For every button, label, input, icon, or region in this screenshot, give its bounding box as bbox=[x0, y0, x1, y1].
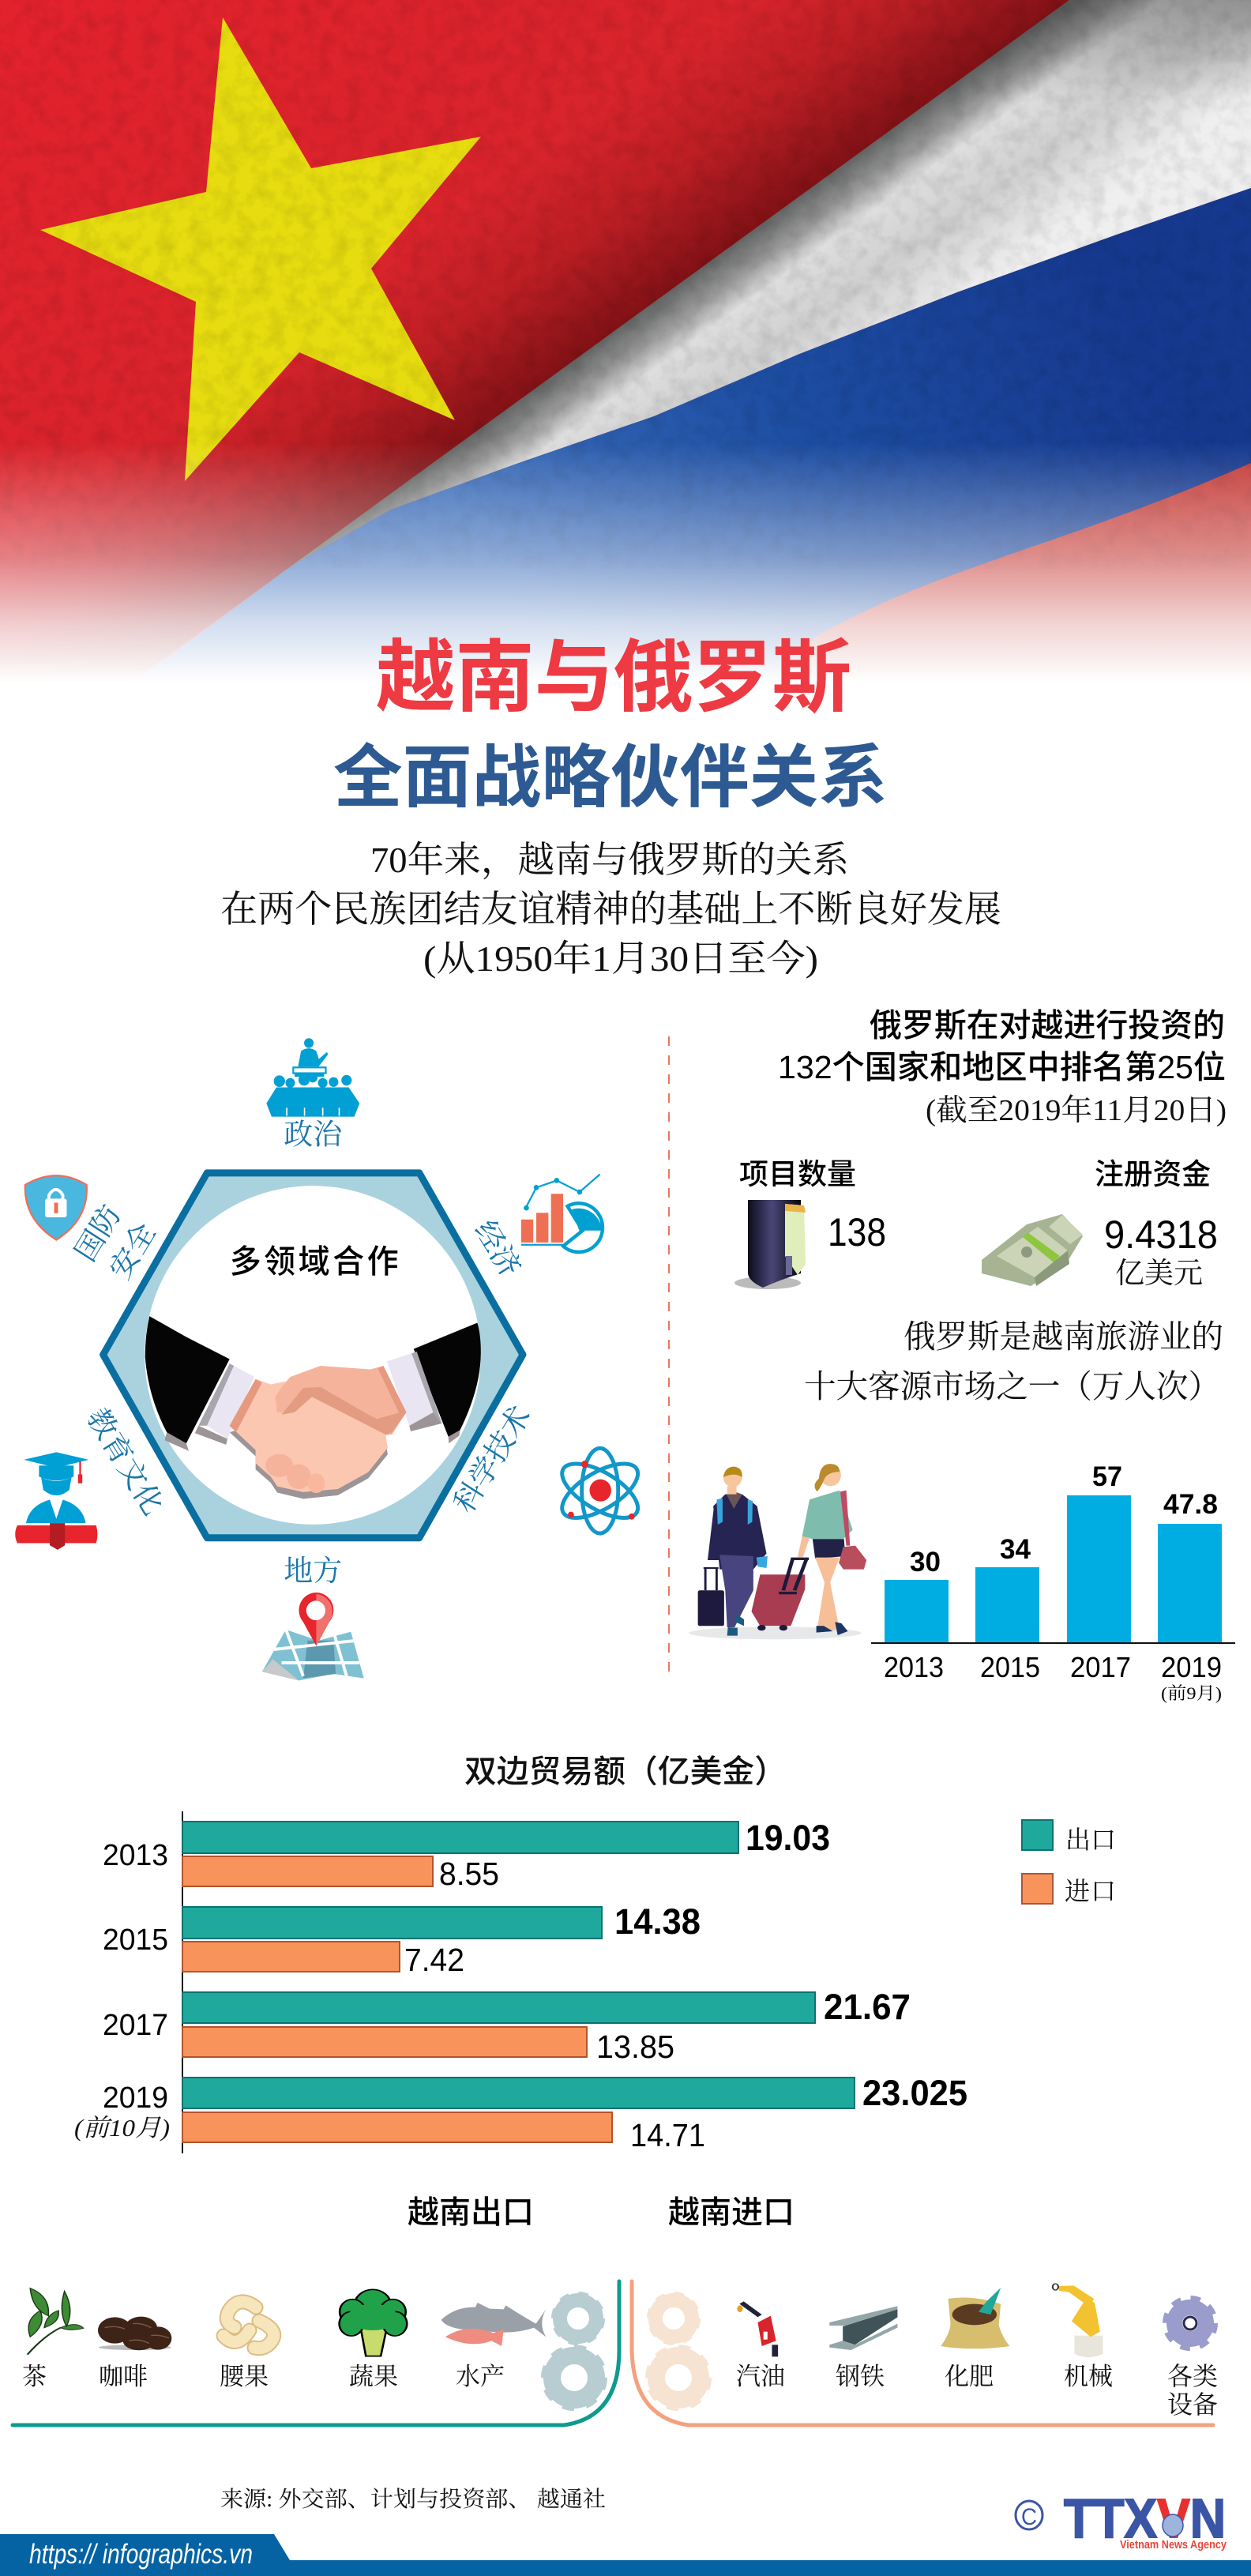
stat value: 138: 138 bbox=[828, 1210, 886, 1254]
stat label: project count: 项目数量 bbox=[739, 1158, 856, 1190]
icon: defence shield bbox=[25, 1175, 87, 1240]
year labels: 2017 bbox=[1070, 1651, 1131, 1683]
panel: bilateral trade chart bbox=[74, 1754, 1116, 2153]
heading: tourism source market: 俄罗斯是越南旅游业的 bbox=[904, 1318, 1223, 1355]
group: 2015 bbox=[103, 1901, 701, 1978]
frame line: imports bbox=[632, 2281, 1213, 2425]
bar values: 57 bbox=[1092, 1461, 1122, 1492]
group: 2017: 21.67 bbox=[824, 1987, 911, 2027]
bar values bbox=[910, 1461, 1218, 1578]
bar 2013 bbox=[885, 1580, 949, 1643]
legend: 出口 bbox=[1065, 1826, 1116, 1854]
hexagon frame bbox=[103, 1173, 523, 1538]
icon: fish bbox=[441, 2303, 546, 2346]
flag: Russia red band bbox=[774, 463, 1251, 695]
footer url: https:// infographics.vn bbox=[29, 2539, 253, 2570]
heading: investment ranking: 132个国家和地区中排名第25位 bbox=[778, 1049, 1226, 1085]
year labels: 2019 bbox=[1161, 1651, 1222, 1683]
axis bbox=[871, 1642, 1235, 1644]
frame line: exports bbox=[13, 2281, 619, 2425]
axis bbox=[182, 1811, 183, 2153]
labels: import products bbox=[736, 2362, 1218, 2419]
heading: tourism source market bbox=[804, 1318, 1223, 1405]
heading: imports: 越南进口 bbox=[668, 2195, 795, 2230]
label: national defence and security: 安全 bbox=[103, 1217, 162, 1285]
group: 2015: 7.42 bbox=[404, 1942, 464, 1978]
label: education and culture: 教育文化 bbox=[80, 1402, 169, 1521]
icon: coffee beans bbox=[98, 2317, 171, 2350]
heading: bilateral trade: 双边贸易额（亿美金） bbox=[464, 1754, 787, 1789]
flag: Russia white band bbox=[287, 0, 1251, 569]
heading: tourism source market: 十大客源市场之一（万人次） bbox=[804, 1368, 1220, 1405]
labels: import products: 设备 bbox=[1167, 2390, 1218, 2419]
year labels: (前9月) bbox=[1161, 1683, 1222, 1703]
icon: map pin bbox=[262, 1593, 364, 1680]
icon: fuel nozzle bbox=[737, 2303, 778, 2356]
intro text block: 70年来，越南与俄罗斯的关系 bbox=[370, 840, 849, 880]
bar values: 34 bbox=[1000, 1534, 1031, 1565]
title: Vietnam and Russia: 越南与俄罗斯 bbox=[376, 613, 851, 728]
logo wordmark: TTXVN bbox=[1064, 2488, 1226, 2549]
intro text block: 在两个民族团结友谊精神的基础上不断良好发展 bbox=[220, 889, 1001, 931]
labels: import products: 机械 bbox=[1064, 2363, 1113, 2390]
white band top shading bbox=[928, 0, 1251, 103]
panel: investment ranking bbox=[734, 1007, 1227, 1290]
icon: cashews bbox=[224, 2302, 274, 2348]
logo: TTXVN bbox=[1016, 2488, 1227, 2552]
labels: export products: 腰果 bbox=[220, 2363, 269, 2390]
bar 2015 bbox=[975, 1567, 1039, 1643]
copyright mark: C bbox=[1021, 2504, 1037, 2530]
group: 2017: 2017 bbox=[103, 2009, 168, 2042]
labels: export products: 水产 bbox=[456, 2363, 505, 2390]
group: 2017: 13.85 bbox=[596, 2029, 674, 2065]
icon: politics bbox=[266, 1038, 359, 1117]
panel: Vietnam exports bbox=[13, 2195, 619, 2425]
group: 2019: 23.025 bbox=[862, 2073, 967, 2113]
white circle bbox=[145, 1186, 481, 1525]
icon: broccoli bbox=[340, 2289, 407, 2356]
panel: multi-field cooperation hexagon bbox=[15, 1038, 646, 1680]
group: 2013 bbox=[103, 1818, 830, 1892]
heading: investment ranking bbox=[778, 1007, 1226, 1085]
heading: exports: 越南出口 bbox=[408, 2195, 534, 2230]
heading: investment ranking: 俄罗斯在对越进行投资的 bbox=[870, 1007, 1225, 1044]
icon: tea bbox=[28, 2288, 84, 2355]
icon: equipment gear bbox=[1166, 2299, 1215, 2348]
logo globe bbox=[1163, 2514, 1183, 2537]
bar 2017 bbox=[1067, 1495, 1131, 1643]
logo tagline: Vietnam News Agency bbox=[1120, 2538, 1227, 2552]
icon: science atom bbox=[554, 1448, 646, 1533]
group: 2019: 2019 bbox=[103, 2081, 168, 2115]
panel: Vietnam imports bbox=[632, 2195, 1218, 2425]
stat value: 9.4318: 9.4318 bbox=[1104, 1213, 1218, 1257]
flag: Russia blue band bbox=[114, 188, 1251, 695]
year labels: 2015 bbox=[980, 1651, 1040, 1683]
label: localities: 地方 bbox=[284, 1555, 342, 1587]
flag fold shadow bbox=[0, 0, 1069, 695]
flag: Vietnam red field bbox=[0, 0, 1251, 695]
group: 2015: 14.38 bbox=[614, 1901, 701, 1942]
icon: peach gear pair bbox=[649, 2295, 708, 2407]
stat unit: 100 million USD: 亿美元 bbox=[1115, 1258, 1203, 1290]
bar values: 30 bbox=[910, 1547, 941, 1578]
heading: multi-field cooperation: 多领域合作 bbox=[230, 1235, 399, 1282]
bar values: 47.8 bbox=[1163, 1489, 1218, 1520]
labels: import products: 化肥 bbox=[945, 2363, 994, 2390]
label: national defence and security: 国防 bbox=[70, 1200, 128, 1267]
footer bar bbox=[0, 2534, 1251, 2576]
group: 2019: (前10月) bbox=[74, 2114, 170, 2142]
date note: (截至2019年11月20日) bbox=[926, 1094, 1227, 1127]
labels: import products: 各类 bbox=[1167, 2362, 1218, 2390]
label: politics: 政治 bbox=[284, 1118, 344, 1150]
flag: Vietnam yellow star bbox=[40, 17, 481, 481]
intro text block bbox=[220, 840, 1001, 979]
label: economy: 经济 bbox=[468, 1215, 527, 1283]
icon: robot arm bbox=[1053, 2284, 1103, 2357]
legend: 进口 bbox=[1065, 1877, 1116, 1905]
year labels bbox=[884, 1651, 1222, 1703]
intro text block: (从1950年1月30日至今) bbox=[423, 938, 818, 979]
hero: flags of Vietnam and Russia bbox=[0, 0, 1251, 695]
labels: export products bbox=[22, 2363, 505, 2390]
hero fade to white bbox=[0, 442, 1251, 695]
icon: banknotes bbox=[982, 1214, 1083, 1286]
icon: project binder bbox=[734, 1200, 806, 1289]
icon: economy chart bbox=[521, 1175, 603, 1252]
icon: fertilizer sack bbox=[941, 2288, 1009, 2348]
group: 2013: 2013 bbox=[103, 1839, 168, 1872]
icon: steel beam bbox=[829, 2306, 897, 2350]
labels: import products: 汽油 bbox=[736, 2363, 785, 2390]
icon: handshake bbox=[145, 1316, 481, 1499]
group: 2013: 19.03 bbox=[746, 1818, 830, 1858]
group: 2019 bbox=[74, 2073, 967, 2153]
group: 2015: 2015 bbox=[103, 1924, 168, 1957]
panel: tourism bbox=[689, 1318, 1235, 1703]
group: 2017 bbox=[103, 1987, 911, 2065]
label: science and technology: 科学技术 bbox=[448, 1401, 537, 1519]
labels: export products: 蔬果 bbox=[349, 2363, 398, 2390]
icon: education graduate bbox=[15, 1452, 97, 1550]
bar chart: tourists bbox=[871, 1461, 1235, 1703]
group: 2013: 8.55 bbox=[439, 1856, 499, 1892]
illustration: travellers bbox=[689, 1464, 866, 1639]
legend bbox=[1022, 1820, 1116, 1905]
copyright mark bbox=[1016, 2501, 1042, 2530]
label: national defence and security bbox=[70, 1200, 162, 1285]
divider: dashed line bbox=[668, 1036, 670, 1678]
source note: 来源: 外交部、计划与投资部、 越通社 bbox=[220, 2487, 606, 2512]
labels: export products: 茶 bbox=[22, 2363, 47, 2390]
labels: export products: 咖啡 bbox=[99, 2363, 148, 2390]
bar 2019 bbox=[1158, 1524, 1222, 1643]
stat label: registered capital: 注册资金 bbox=[1095, 1158, 1211, 1190]
group: 2019: 14.71 bbox=[630, 2117, 705, 2153]
flag fabric texture bbox=[0, 0, 1251, 569]
subtitle: comprehensive strategic partnership: 全面战略伙伴关系 bbox=[333, 722, 888, 822]
icon: pale gear pair bbox=[545, 2295, 603, 2407]
labels: import products: 钢铁 bbox=[836, 2363, 885, 2390]
year labels: 2013 bbox=[884, 1651, 944, 1683]
